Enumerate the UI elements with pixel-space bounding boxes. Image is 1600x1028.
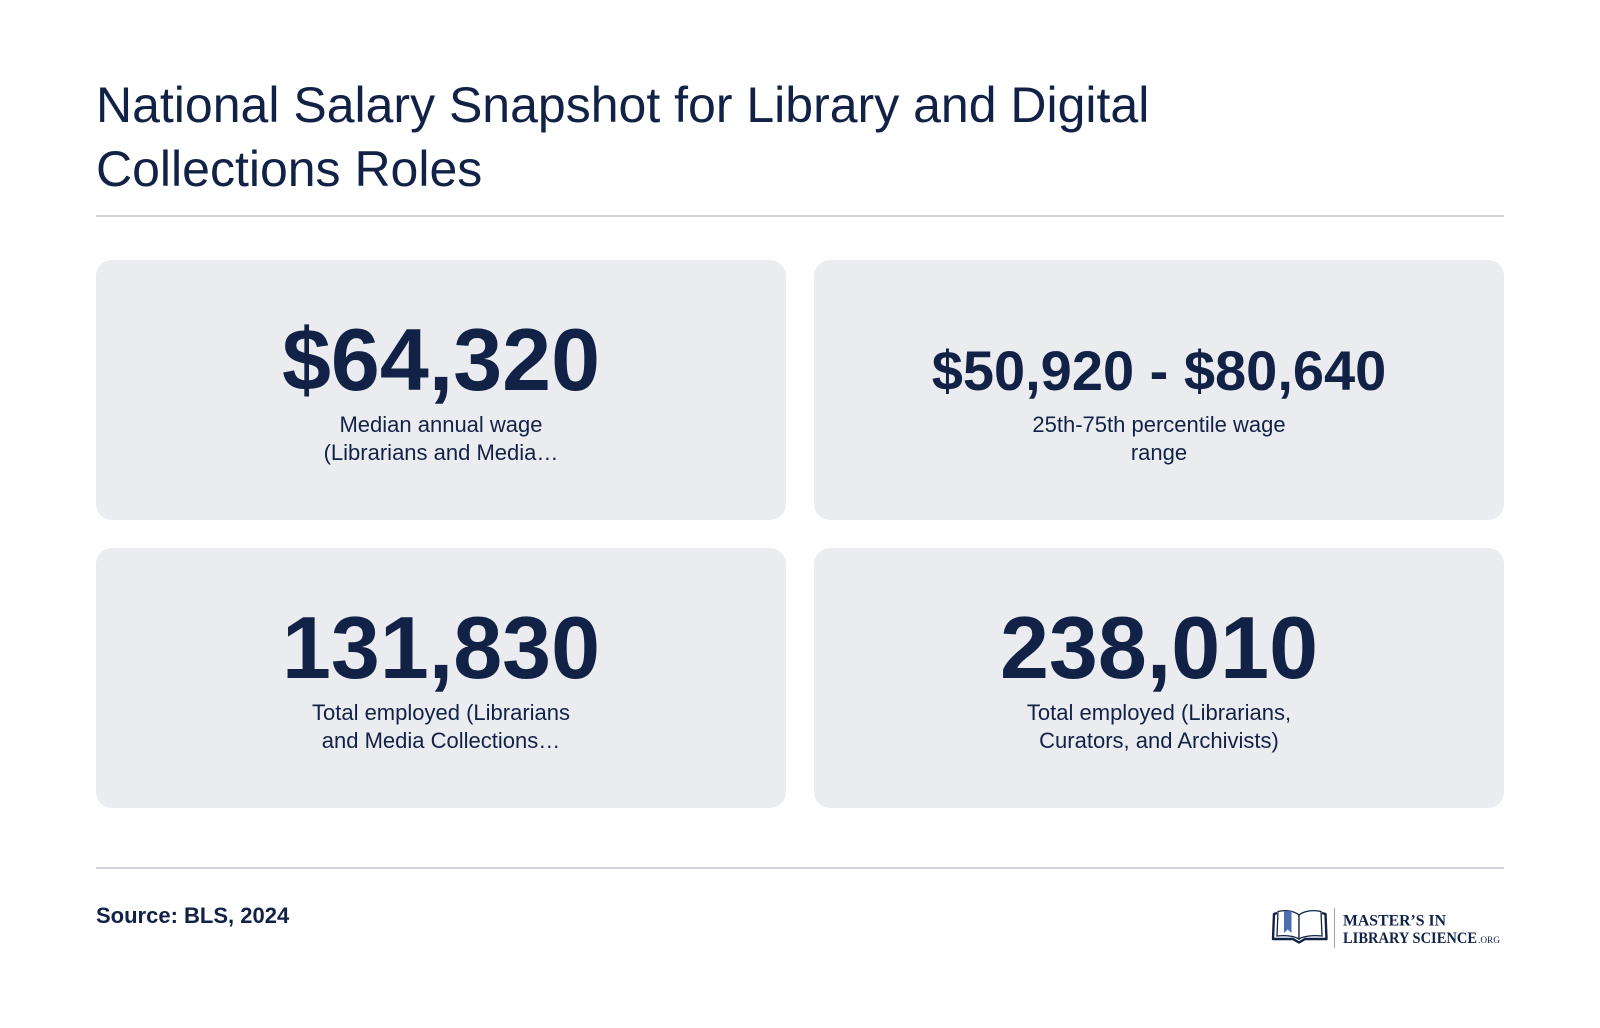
stat: wage range value: $50,920 - $80,640 [932, 339, 1386, 402]
label: median wage [324, 412, 558, 465]
label: total employed: Curators, and Archivists) [1039, 728, 1279, 753]
divider [1334, 908, 1335, 948]
stat: total employed value: 131,830 [282, 598, 600, 697]
panel: total employed librarians curators archivists [814, 548, 1504, 808]
panel: total employed librarians and media collections [96, 548, 786, 808]
label: wage range: range [1131, 440, 1187, 465]
label: median wage: Median annual wage [339, 412, 543, 437]
stat: median wage value: $64,320 [282, 310, 600, 409]
logo wordmark [1343, 912, 1501, 947]
label: total employed [312, 700, 570, 753]
label: wage range: 25th-75th percentile wage [1032, 412, 1286, 437]
label: wage range [1032, 412, 1286, 465]
logo wordmark: MASTER’S IN [1343, 912, 1446, 930]
source note: Source: BLS, 2024 [96, 903, 289, 928]
label: median wage: (Librarians and Media… [324, 440, 558, 465]
title: National Salary Snapshot for Library and Digital [96, 77, 1149, 133]
panel: percentile wage range [814, 260, 1504, 520]
label: total employed: Total employed (Librarians [312, 700, 570, 725]
title [96, 77, 1149, 197]
stat: total employed value: 238,010 [1000, 598, 1318, 697]
title: Collections Roles [96, 141, 482, 197]
logo: Master's in Library Science [1272, 908, 1501, 948]
panel: median annual wage [96, 260, 786, 520]
label: total employed: and Media Collections… [322, 728, 560, 753]
logo wordmark: .ORG [1478, 935, 1501, 945]
label: total employed [1027, 700, 1291, 753]
logo wordmark: LIBRARY SCIENCE [1343, 930, 1477, 947]
icon: open book [1273, 911, 1326, 942]
label: total employed: Total employed (Librarians, [1027, 700, 1291, 725]
